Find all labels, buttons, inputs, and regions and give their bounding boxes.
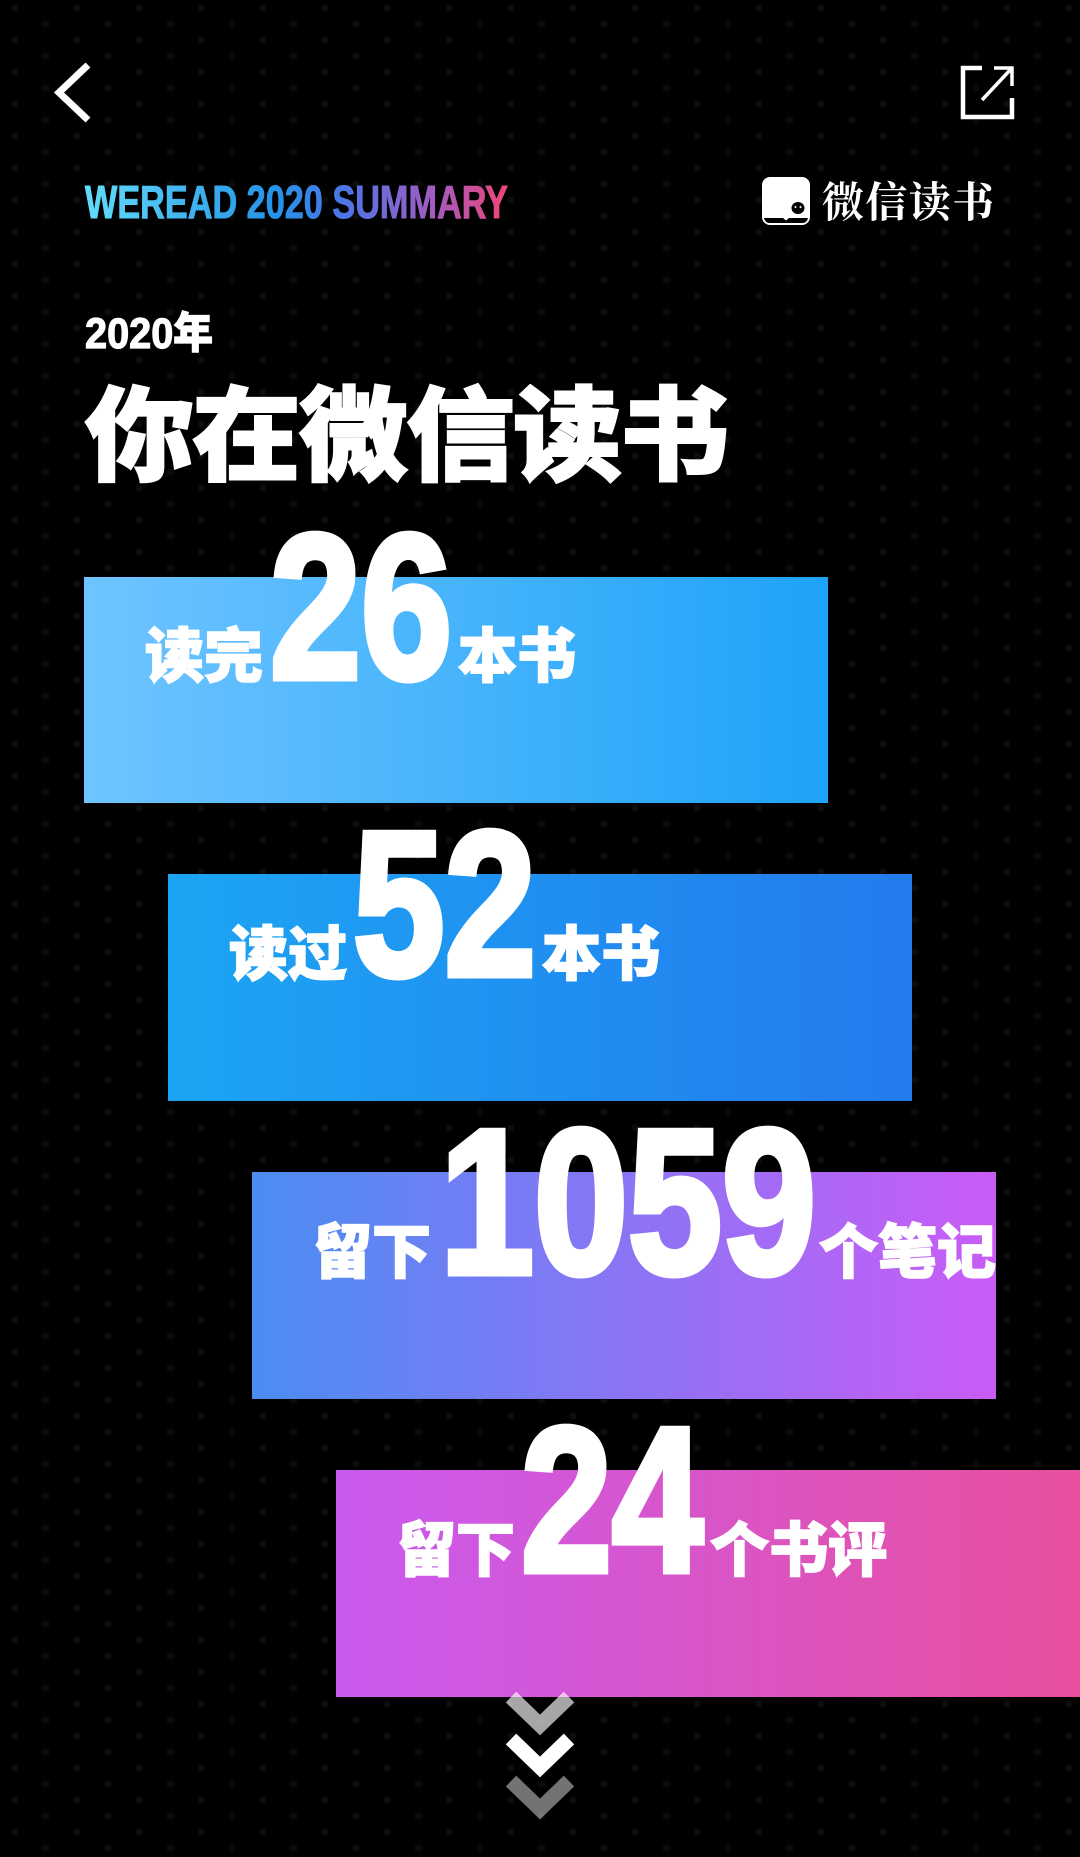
logo: WeRead: [762, 177, 995, 227]
label: reviews: 个书评: [710, 1518, 887, 1584]
subtitle: WeRead 2020 Summary: WEREAD 2020 SUMMARY: [85, 176, 508, 228]
number: 52: 52: [353, 789, 536, 1019]
panel: books read: [168, 789, 912, 1101]
label: notes: 个笔记: [819, 1220, 996, 1286]
icon: scroll down chevrons: [511, 1697, 569, 1809]
label: read: 读过: [229, 922, 347, 988]
heading: year: 2020年: [85, 310, 213, 358]
label: books: 本书: [458, 624, 576, 690]
label: left: 留下: [313, 1220, 431, 1286]
label: left: 留下: [397, 1518, 515, 1584]
number: 26: 26: [270, 492, 452, 722]
number: 24: 24: [521, 1385, 703, 1615]
logo wordmark: 微信读书: [822, 180, 995, 227]
bar: [336, 1470, 1080, 1697]
bar: [252, 1172, 996, 1399]
heading: title: 你在微信读书: [85, 380, 729, 494]
icon: share: [963, 68, 1012, 117]
bar: [84, 577, 828, 803]
icon: back arrow: [59, 65, 88, 120]
label: finished: 读完: [145, 624, 263, 690]
panel: notes: [252, 1087, 996, 1399]
label: books: 本书: [542, 922, 660, 988]
bar: [168, 874, 912, 1101]
panel: books finished: [84, 492, 828, 803]
panel: reviews: [336, 1385, 1080, 1697]
icon: logo book: [762, 177, 810, 225]
number: 1059: 1059: [440, 1087, 816, 1317]
